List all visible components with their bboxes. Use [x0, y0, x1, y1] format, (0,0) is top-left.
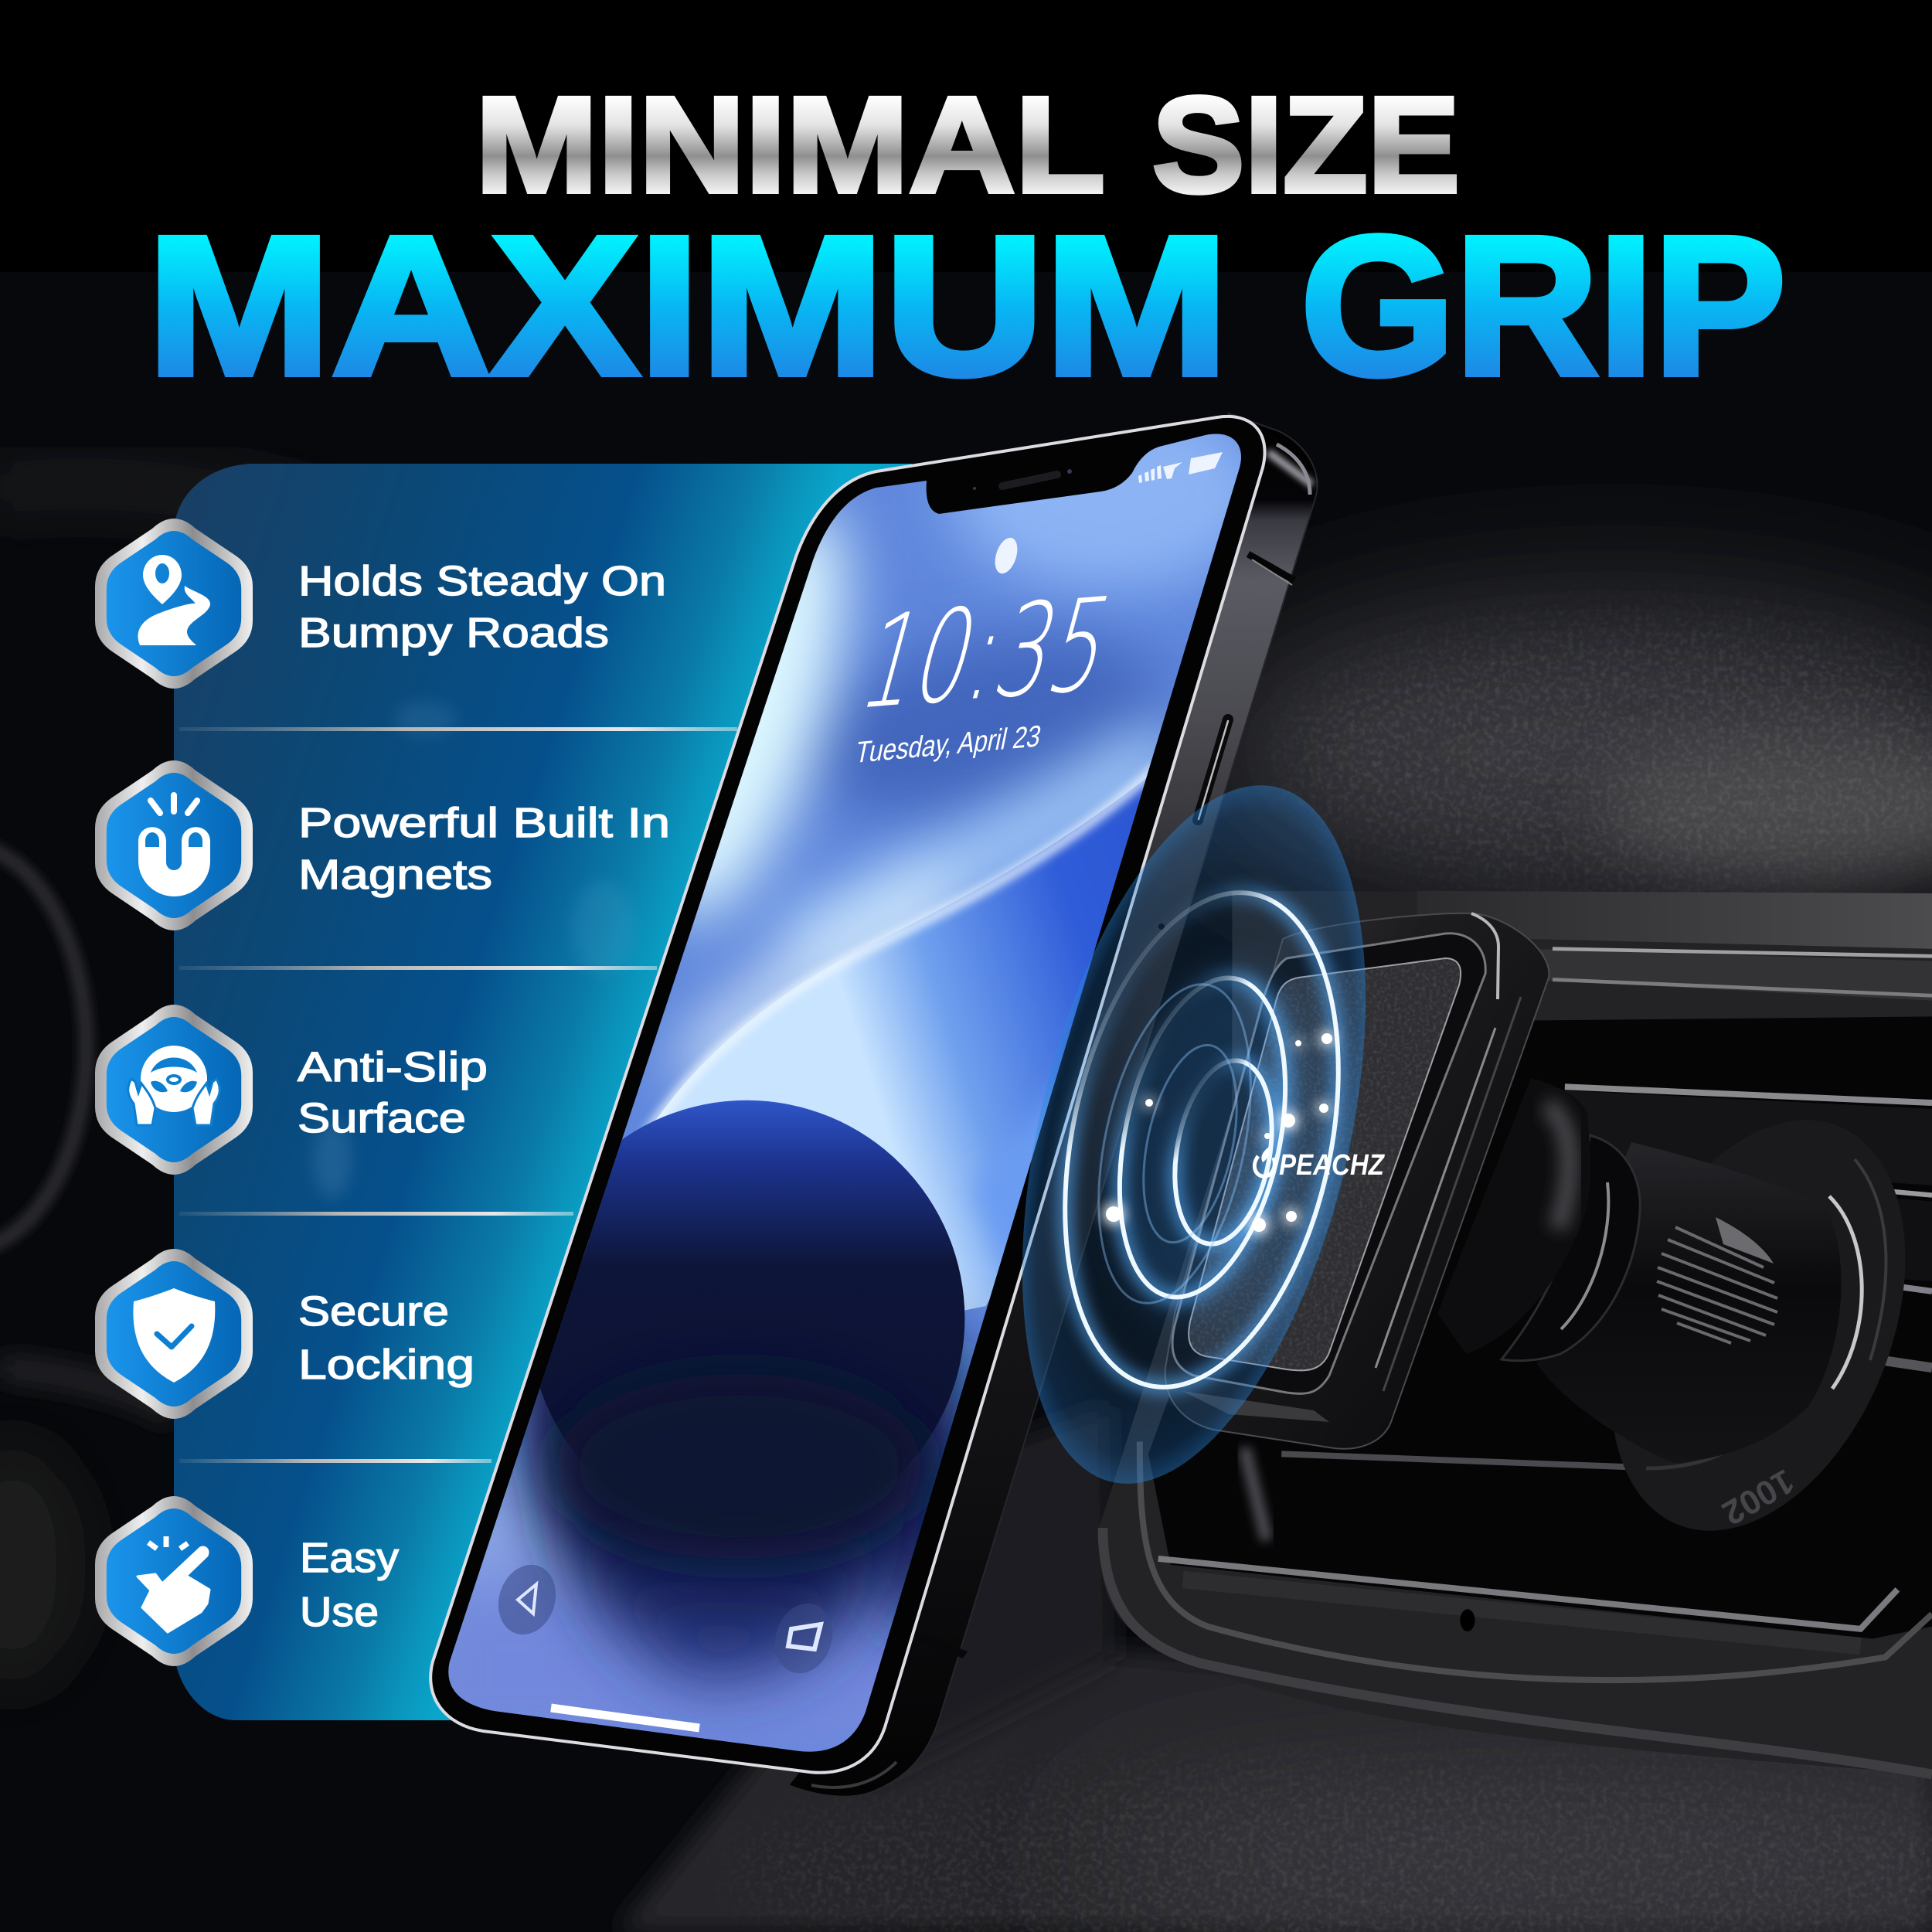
text: Magnets [298, 852, 492, 898]
lock screen camera button [767, 1596, 841, 1681]
icon: pointing hand [95, 1496, 253, 1666]
phone notch details [973, 469, 1072, 490]
raised lettering on the disc: 1002 [1716, 1461, 1801, 1532]
cone [1537, 1142, 1842, 1463]
brand logo PEACHZ [1254, 1147, 1386, 1182]
icon: road with location pin [95, 519, 253, 689]
feature: Holds Steady On Bumpy Roads [95, 519, 666, 689]
air vent [1099, 891, 1932, 1774]
neck ring [1502, 1135, 1640, 1361]
magnetic field rings [1023, 867, 1380, 1413]
magnetic plate [1165, 913, 1549, 1449]
brand logo PEACHZ: PEACHZ [1279, 1149, 1386, 1182]
text: Surface [298, 1095, 466, 1141]
icon: hands on steering wheel [95, 1005, 253, 1175]
text: Bumpy Roads [298, 610, 609, 656]
icon: magnet [95, 760, 253, 930]
phone front bezel [430, 417, 1265, 1773]
lock screen clock: 10:35 [846, 569, 1128, 739]
title line: MAXIMUM GRIP: MAXIMUM [147, 196, 1229, 417]
text: Locking [298, 1342, 474, 1388]
faint inner field arcs [1073, 971, 1277, 1317]
collar [1437, 1078, 1590, 1354]
status bar icons [1138, 452, 1223, 483]
glowing sparks [1106, 1033, 1332, 1232]
feature: Secure Locking [95, 1249, 474, 1419]
central field glow [1086, 951, 1341, 1337]
text: Anti-Slip [298, 1044, 488, 1090]
title line: MAXIMUM GRIP: GRIP [1301, 196, 1786, 417]
feature panel background [174, 464, 912, 1720]
title line: MAXIMUM GRIP [147, 196, 1786, 417]
feature: Easy Use [95, 1496, 399, 1666]
phone [419, 394, 1317, 1797]
text: Easy [300, 1535, 399, 1581]
magnetic field halo [961, 751, 1427, 1518]
feature: Anti-Slip Surface [95, 1005, 488, 1175]
feature: Powerful Built In Magnets [95, 760, 670, 930]
knob ribs [1657, 1227, 1777, 1343]
home indicator highlight [551, 1708, 699, 1728]
text: Secure [298, 1288, 449, 1335]
text: Powerful Built In [298, 800, 670, 846]
title line: MINIMAL SIZE: MINIMAL [475, 70, 1105, 221]
text: Use [300, 1589, 379, 1635]
phone metal side [788, 413, 1317, 1797]
back disc [1554, 1077, 1932, 1574]
vent mount body [1437, 1077, 1932, 1574]
title line: MINIMAL SIZE [475, 70, 1460, 221]
text: Holds Steady On [298, 558, 666, 604]
divider lines [179, 727, 737, 1463]
icon: shield check [95, 1249, 253, 1419]
small lock shape [991, 535, 1022, 577]
lock screen flashlight button [490, 1557, 564, 1642]
title line: MINIMAL SIZE: SIZE [1152, 70, 1460, 221]
icon: logo flame ring [1254, 1147, 1274, 1176]
phone screen wallpaper [448, 434, 1241, 1752]
lock screen date: Tuesday, April 23 [852, 719, 1044, 770]
